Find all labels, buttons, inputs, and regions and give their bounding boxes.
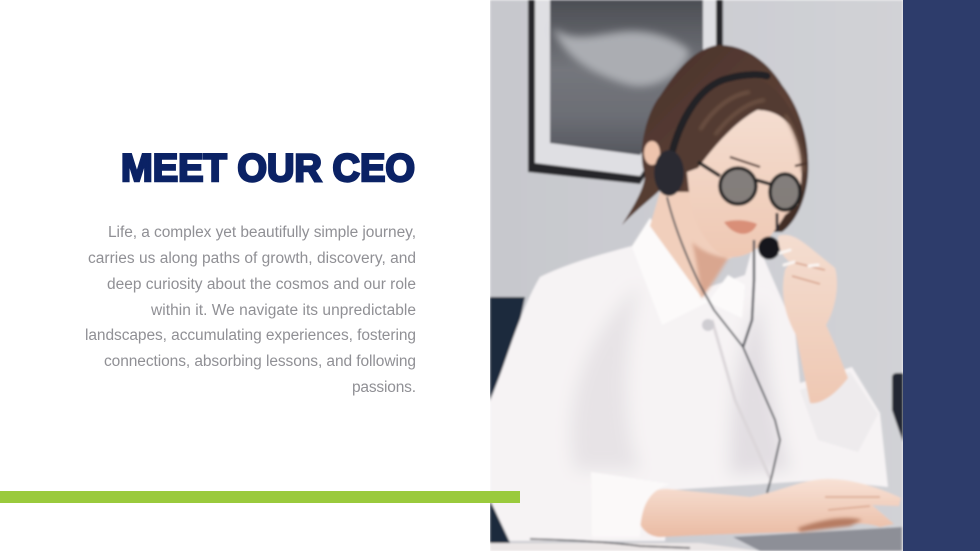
fringe hair — [762, 96, 804, 190]
body text — [85, 224, 416, 396]
neck and face — [650, 110, 803, 298]
glasses — [698, 162, 800, 210]
forearm and typing hand — [638, 479, 901, 537]
desk — [490, 543, 760, 551]
green accent bar — [0, 491, 520, 503]
hair back with loose strands — [622, 45, 808, 232]
office wall — [490, 0, 903, 551]
eyebrows — [730, 157, 808, 167]
fingernails — [780, 250, 818, 266]
finger creases — [792, 262, 825, 284]
laptop — [733, 527, 902, 551]
hand holding microphone — [778, 235, 848, 403]
white shirt — [490, 218, 888, 541]
left shirt cuff — [592, 474, 656, 525]
body text: carries us along paths of growth, discovery, and — [88, 250, 416, 267]
body text: deep curiosity about the cosmos and our role — [107, 276, 416, 293]
finger shadow — [798, 518, 862, 532]
headset — [654, 75, 780, 493]
body text: passions. — [352, 379, 416, 396]
body text: Life, a complex yet beautifully simple journey, — [108, 224, 416, 241]
cable along desk — [530, 539, 690, 548]
heading: MEET OUR CEO — [121, 147, 415, 190]
shirt collar — [722, 274, 740, 315]
body text: connections, absorbing lessons, and following — [104, 353, 416, 370]
hair highlights — [700, 92, 803, 172]
dark chair left — [490, 297, 525, 543]
dark object right — [892, 373, 903, 442]
navy side band — [903, 0, 980, 551]
lips — [724, 220, 757, 234]
body text: landscapes, accumulating experiences, fostering — [85, 327, 416, 344]
finger creases on typing hand — [825, 497, 880, 510]
framed picture — [528, 0, 723, 184]
body text: within it. We navigate its unpredictable — [150, 302, 416, 319]
ear — [644, 141, 660, 165]
photo: CEO wearing a headset at a laptop — [490, 0, 903, 551]
shirt button — [702, 319, 714, 331]
